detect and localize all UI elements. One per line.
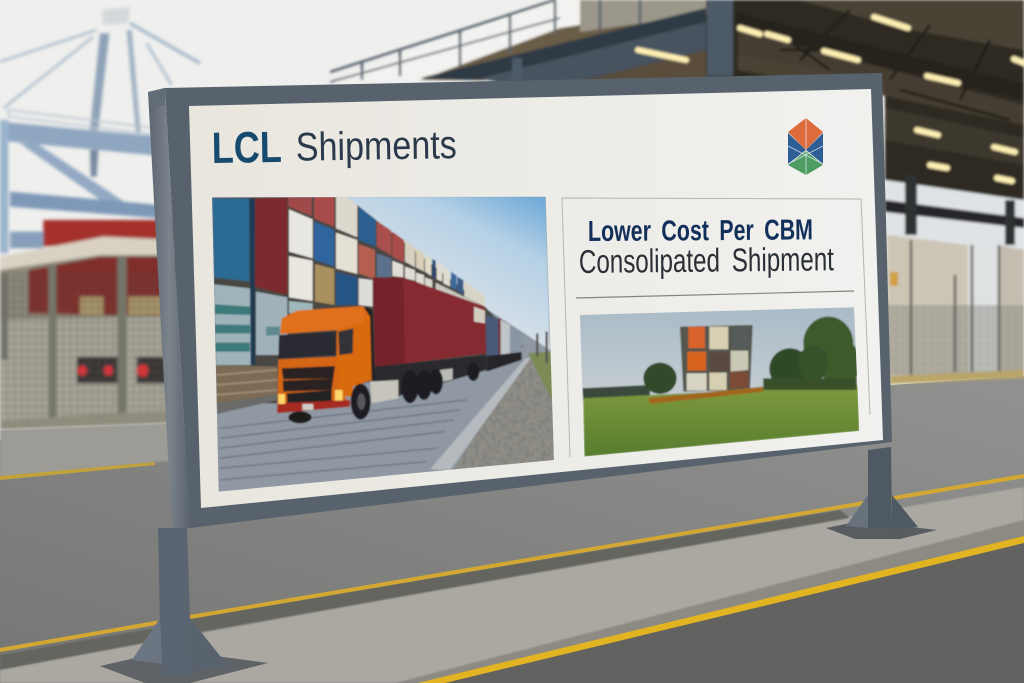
sidewalk and curb (0, 487, 1024, 683)
road markings: yellow line along sidewalk (0, 476, 1024, 650)
cobbled verge (0, 423, 180, 477)
subheading: Consolipated Shipment: Consolipated Shipment (579, 240, 834, 280)
right text box outline (562, 198, 870, 457)
divider line (576, 291, 854, 298)
road markings: far yellow line (0, 462, 155, 480)
photo: truck and containers (210, 195, 557, 495)
title: LCL Shipments: LCL (211, 123, 282, 173)
left support post (100, 528, 268, 683)
road surface (0, 376, 1024, 683)
right support post (826, 447, 937, 539)
heading: Lower Cost Per CBM: Lower Cost Per CBM (588, 214, 813, 248)
road markings: near yellow line (418, 536, 1024, 683)
foreground lane (430, 536, 1024, 683)
billboard frame (148, 73, 892, 528)
icon: hexagon cube logo (788, 118, 823, 175)
title: LCL Shipments (211, 120, 457, 173)
title: LCL Shipments: Shipments (295, 123, 457, 170)
billboard panel (189, 89, 883, 508)
photo: stacked containers in field (578, 305, 862, 457)
background: port crane and depot (0, 7, 200, 430)
background: covered hall (328, 0, 1024, 384)
